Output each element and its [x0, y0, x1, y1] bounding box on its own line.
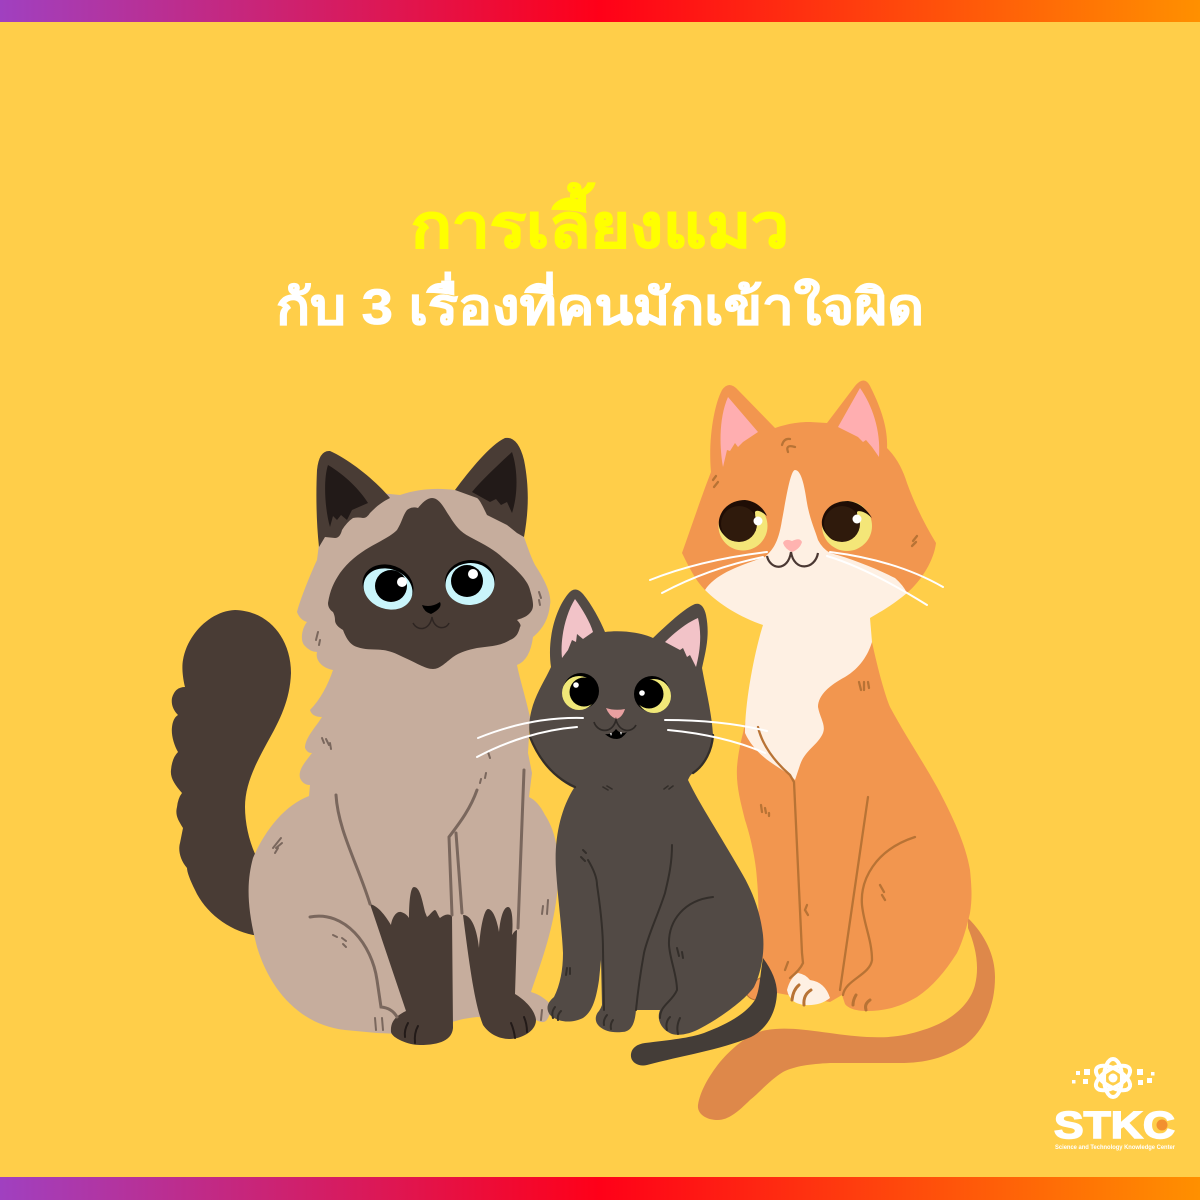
siamese cat tail	[171, 610, 291, 936]
STKC logo	[1054, 1059, 1176, 1151]
orange cat right ear inner	[838, 388, 879, 457]
siamese cat right ear	[455, 438, 528, 537]
siamese cat left eye	[356, 557, 420, 616]
siamese cat body	[249, 489, 558, 1034]
orange cat left eye	[718, 500, 768, 550]
black cat right eye	[634, 676, 671, 713]
logo tagline: Science and Technology Knowledge Center	[1055, 1144, 1176, 1151]
siamese cat mouth	[413, 617, 449, 629]
orange cat white chest and muzzle	[705, 470, 907, 780]
logo atom emblem	[1092, 1059, 1134, 1097]
title line 2: กับ 3 เรื่องที่คนมักเข้าใจผิด	[276, 272, 924, 335]
orange cat mouth	[767, 552, 818, 567]
orange cat tail	[698, 918, 995, 1120]
logo orange dot	[1156, 1120, 1168, 1130]
black cat left ear inner	[562, 599, 593, 658]
black cat nose	[606, 708, 625, 719]
black cat body lines	[530, 735, 713, 1034]
siamese cat fur lines	[273, 592, 548, 1030]
title	[276, 182, 924, 335]
siamese cat left dark leg	[370, 887, 453, 1045]
orange cat left ear inner	[721, 397, 758, 467]
orange cat body lines	[713, 439, 917, 1010]
orange cat right eye	[822, 501, 872, 551]
siamese cat left ear inner	[325, 465, 368, 527]
orange cat hind paw	[747, 978, 765, 1000]
black cat left eye	[562, 673, 599, 710]
siamese cat nose	[422, 602, 441, 614]
black cat	[529, 590, 777, 1065]
black cat tail	[631, 958, 777, 1065]
siamese cat right ear inner	[472, 452, 516, 513]
siamese cat right dark leg	[463, 907, 536, 1039]
siamese cat face mask	[328, 498, 533, 669]
top gradient bar	[0, 0, 1200, 22]
orange cat head	[682, 380, 936, 625]
logo wordmark: STKC	[1054, 1105, 1175, 1147]
siamese cat	[249, 438, 558, 1045]
orange cat white paw	[787, 973, 830, 1005]
title line 1: การเลี้ยงแมว	[411, 182, 789, 260]
siamese cat left ear	[316, 451, 390, 547]
siamese cat paw claws	[405, 1017, 527, 1043]
black cat right ear inner	[665, 618, 700, 667]
logo pixel dots	[1072, 1069, 1154, 1085]
bottom gradient bar	[0, 1177, 1200, 1200]
black cat open mouth	[605, 729, 627, 739]
siamese cat right eye	[443, 558, 497, 607]
black cat body	[529, 590, 763, 1035]
orange cat	[682, 380, 972, 1011]
black cat mouth line	[594, 720, 636, 730]
orange cat nose	[783, 539, 802, 552]
whiskers	[477, 552, 943, 757]
orange cat body	[737, 640, 972, 1011]
